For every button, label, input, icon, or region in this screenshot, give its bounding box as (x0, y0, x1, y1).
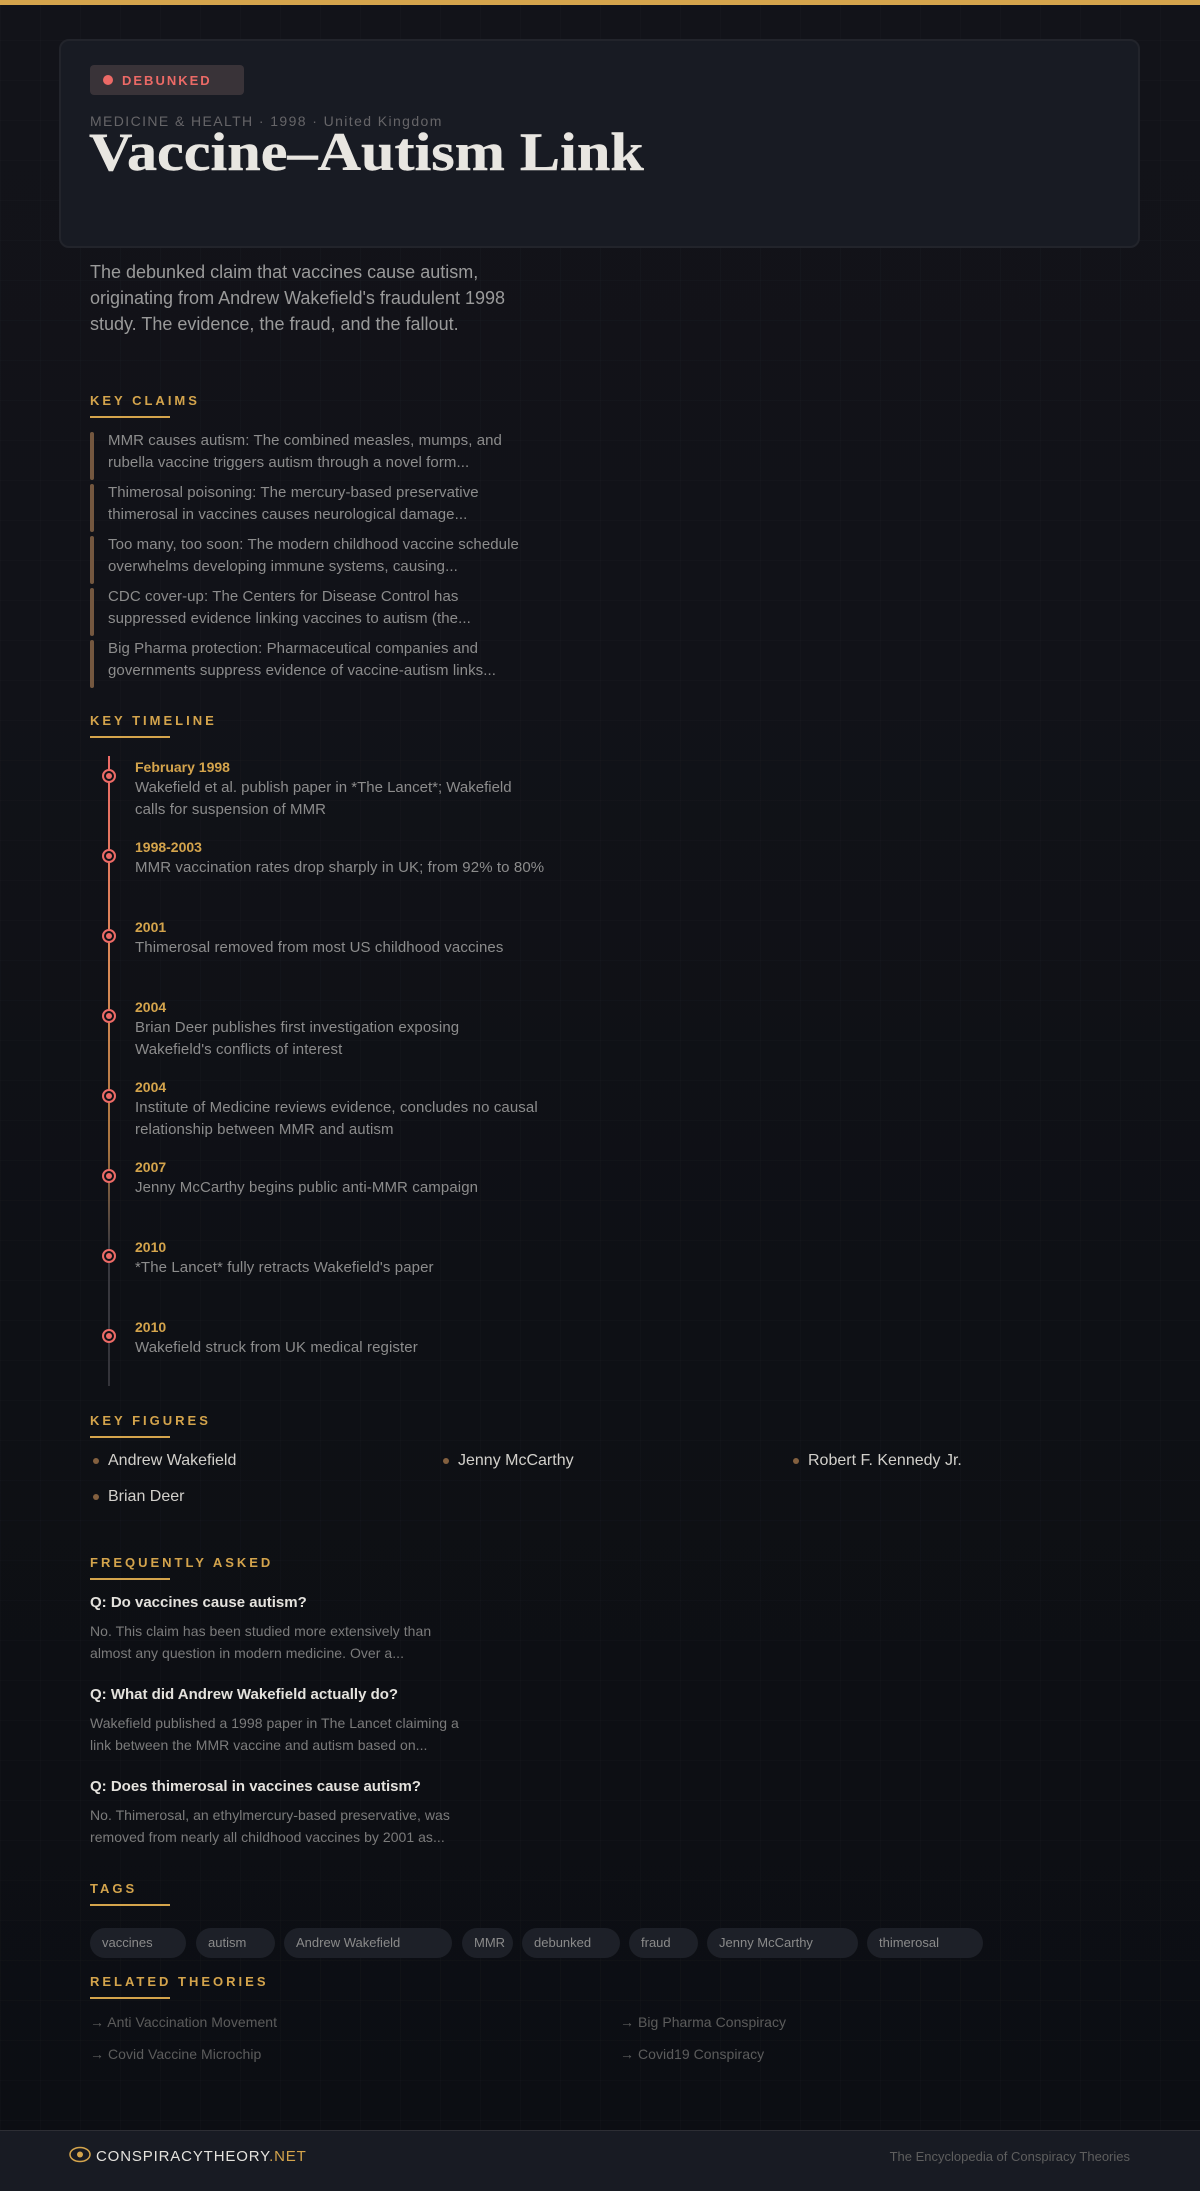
tag list: fraud (641, 1935, 671, 1950)
faq 2 (90, 1686, 459, 1753)
text: Q: Do vaccines cause autism? (90, 1594, 307, 1611)
tag list: Jenny McCarthy (719, 1935, 813, 1950)
timeline event: 2001: Thimerosal removed from most US childhood vaccines (135, 939, 503, 956)
claim 5: governments suppress evidence of vaccine-autism links... (108, 662, 496, 679)
timeline event: 2004 Institute of Medicine (102, 1079, 538, 1138)
timeline event: 2010 retraction (102, 1239, 434, 1276)
timeline event: 2010 retraction: *The Lancet* fully retracts Wakefield's paper (135, 1259, 434, 1276)
timeline event: 1998-2003 (102, 839, 544, 876)
heading: key timeline: KEY TIMELINE (90, 713, 217, 728)
category and date meta: MEDICINE & HEALTH · 1998 · United Kingdom (90, 113, 443, 129)
badge: debunked: DEBUNKED (122, 73, 212, 88)
text: 1998-2003 (135, 839, 202, 855)
text: 2004 (135, 999, 166, 1015)
claim 5: Big Pharma protection: Pharmaceutical companies and (108, 640, 478, 657)
heading: frequently asked: FREQUENTLY ASKED (90, 1555, 273, 1570)
related: Anti Vaccination Movement: → Anti Vaccination Movement (90, 2014, 277, 2030)
top accent bar (0, 0, 1200, 5)
claim 2 (90, 484, 479, 532)
timeline event: February 1998: calls for suspension of MMR (135, 801, 326, 818)
text: 2001 (135, 919, 166, 935)
figure: Brian Deer: Brian Deer (108, 1488, 184, 1505)
faq 3: No. Thimerosal, an ethylmercury-based preservative, was (90, 1807, 450, 1823)
claim 3: overwhelms developing immune systems, causing... (108, 558, 458, 575)
timeline event: 2004 Institute of Medicine: Institute of Medicine reviews evidence, concludes no causal (135, 1099, 538, 1116)
faq 1 (90, 1594, 431, 1661)
related: Covid19 Conspiracy: → Covid19 Conspiracy (620, 2046, 764, 2062)
timeline event: 1998-2003: MMR vaccination rates drop sharply in UK; from 92% to 80% (135, 859, 544, 876)
claim 2: thimerosal in vaccines causes neurological damage... (108, 506, 467, 523)
timeline event: 2004 Institute of Medicine: relationship between MMR and autism (135, 1121, 394, 1138)
figure: Andrew Wakefield: Andrew Wakefield (108, 1452, 236, 1469)
timeline event: 2001 (102, 919, 503, 956)
lead paragraph (90, 262, 505, 334)
text: Q: Does thimerosal in vaccines cause autism? (90, 1778, 421, 1795)
panel: header (59, 39, 1140, 248)
faq 2: link between the MMR vaccine and autism based on... (90, 1737, 427, 1753)
tag list: vaccines (102, 1935, 153, 1950)
text: 2010 (135, 1239, 166, 1255)
logo wordmark: CONSPIRACYTHEORY.NET (96, 2148, 307, 2165)
tag list: autism (208, 1935, 246, 1950)
timeline line (108, 756, 110, 1386)
timeline event: 2010 struck off (102, 1319, 418, 1356)
lead paragraph: study. The evidence, the fraud, and the fallout. (90, 314, 459, 334)
related: Covid Vaccine Microchip: → Covid Vaccine Microchip (90, 2046, 261, 2062)
claim 1 (90, 432, 502, 480)
footer (0, 2130, 1200, 2191)
lead paragraph: The debunked claim that vaccines cause autism, (90, 262, 478, 282)
claim 1: MMR causes autism: The combined measles, mumps, and (108, 432, 502, 449)
timeline event: February 1998: Wakefield et al. publish paper in *The Lancet*; Wakefield (135, 779, 512, 796)
text: Q: What did Andrew Wakefield actually do? (90, 1686, 398, 1703)
figure: Jenny McCarthy: Jenny McCarthy (458, 1452, 574, 1469)
faq 3: removed from nearly all childhood vaccines by 2001 as... (90, 1829, 445, 1845)
claim 3 (90, 536, 519, 584)
heading: key figures: KEY FIGURES (90, 1413, 211, 1428)
claim 2: Thimerosal poisoning: The mercury-based preservative (108, 484, 479, 501)
timeline event: 2007 (102, 1159, 478, 1196)
timeline event: 2007: Jenny McCarthy begins public anti-MMR campaign (135, 1179, 478, 1196)
faq 1: almost any question in modern medicine. Over a... (90, 1645, 404, 1661)
related: Big Pharma Conspiracy: → Big Pharma Conspiracy (620, 2014, 786, 2030)
tag list: Andrew Wakefield (296, 1935, 400, 1950)
tag list: debunked (534, 1935, 591, 1950)
text: 2010 (135, 1319, 166, 1335)
title: Vaccine–Autism Link (89, 122, 644, 182)
heading: related theories: RELATED THEORIES (90, 1974, 268, 1989)
faq 3 (90, 1778, 450, 1845)
claim 4: CDC cover-up: The Centers for Disease Control has (108, 588, 458, 605)
tag list (90, 1928, 983, 1958)
text: 2004 (135, 1079, 166, 1095)
faq 1: No. This claim has been studied more extensively than (90, 1623, 431, 1639)
badge: debunked (90, 65, 244, 95)
icon: eye logo (69, 2146, 91, 2162)
claim 4: suppressed evidence linking vaccines to autism (the... (108, 610, 471, 627)
timeline event: 2004 Brian Deer: Brian Deer publishes first investigation exposing (135, 1019, 459, 1036)
claim 4 (90, 588, 471, 636)
text: February 1998 (135, 759, 230, 775)
tag list: MMR (474, 1935, 505, 1950)
heading: key claims: KEY CLAIMS (90, 393, 200, 408)
timeline event: February 1998 (102, 759, 512, 818)
lead paragraph: originating from Andrew Wakefield's fraudulent 1998 (90, 288, 505, 308)
faq 2: Wakefield published a 1998 paper in The Lancet claiming a (90, 1715, 459, 1731)
figure: Robert F. Kennedy Jr.: Robert F. Kennedy Jr. (808, 1452, 962, 1469)
timeline event: 2004 Brian Deer: Wakefield's conflicts of interest (135, 1041, 342, 1058)
tag list: thimerosal (879, 1935, 939, 1950)
timeline event: 2010 struck off: Wakefield struck from UK medical register (135, 1339, 418, 1356)
claim 3: Too many, too soon: The modern childhood vaccine schedule (108, 536, 519, 553)
heading: tags: TAGS (90, 1881, 137, 1896)
claim 1: rubella vaccine triggers autism through a novel form... (108, 454, 469, 471)
footer tagline: The Encyclopedia of Conspiracy Theories (890, 2149, 1130, 2164)
text: 2007 (135, 1159, 166, 1175)
timeline event: 2004 Brian Deer (102, 999, 459, 1058)
claim 5 (90, 640, 496, 688)
